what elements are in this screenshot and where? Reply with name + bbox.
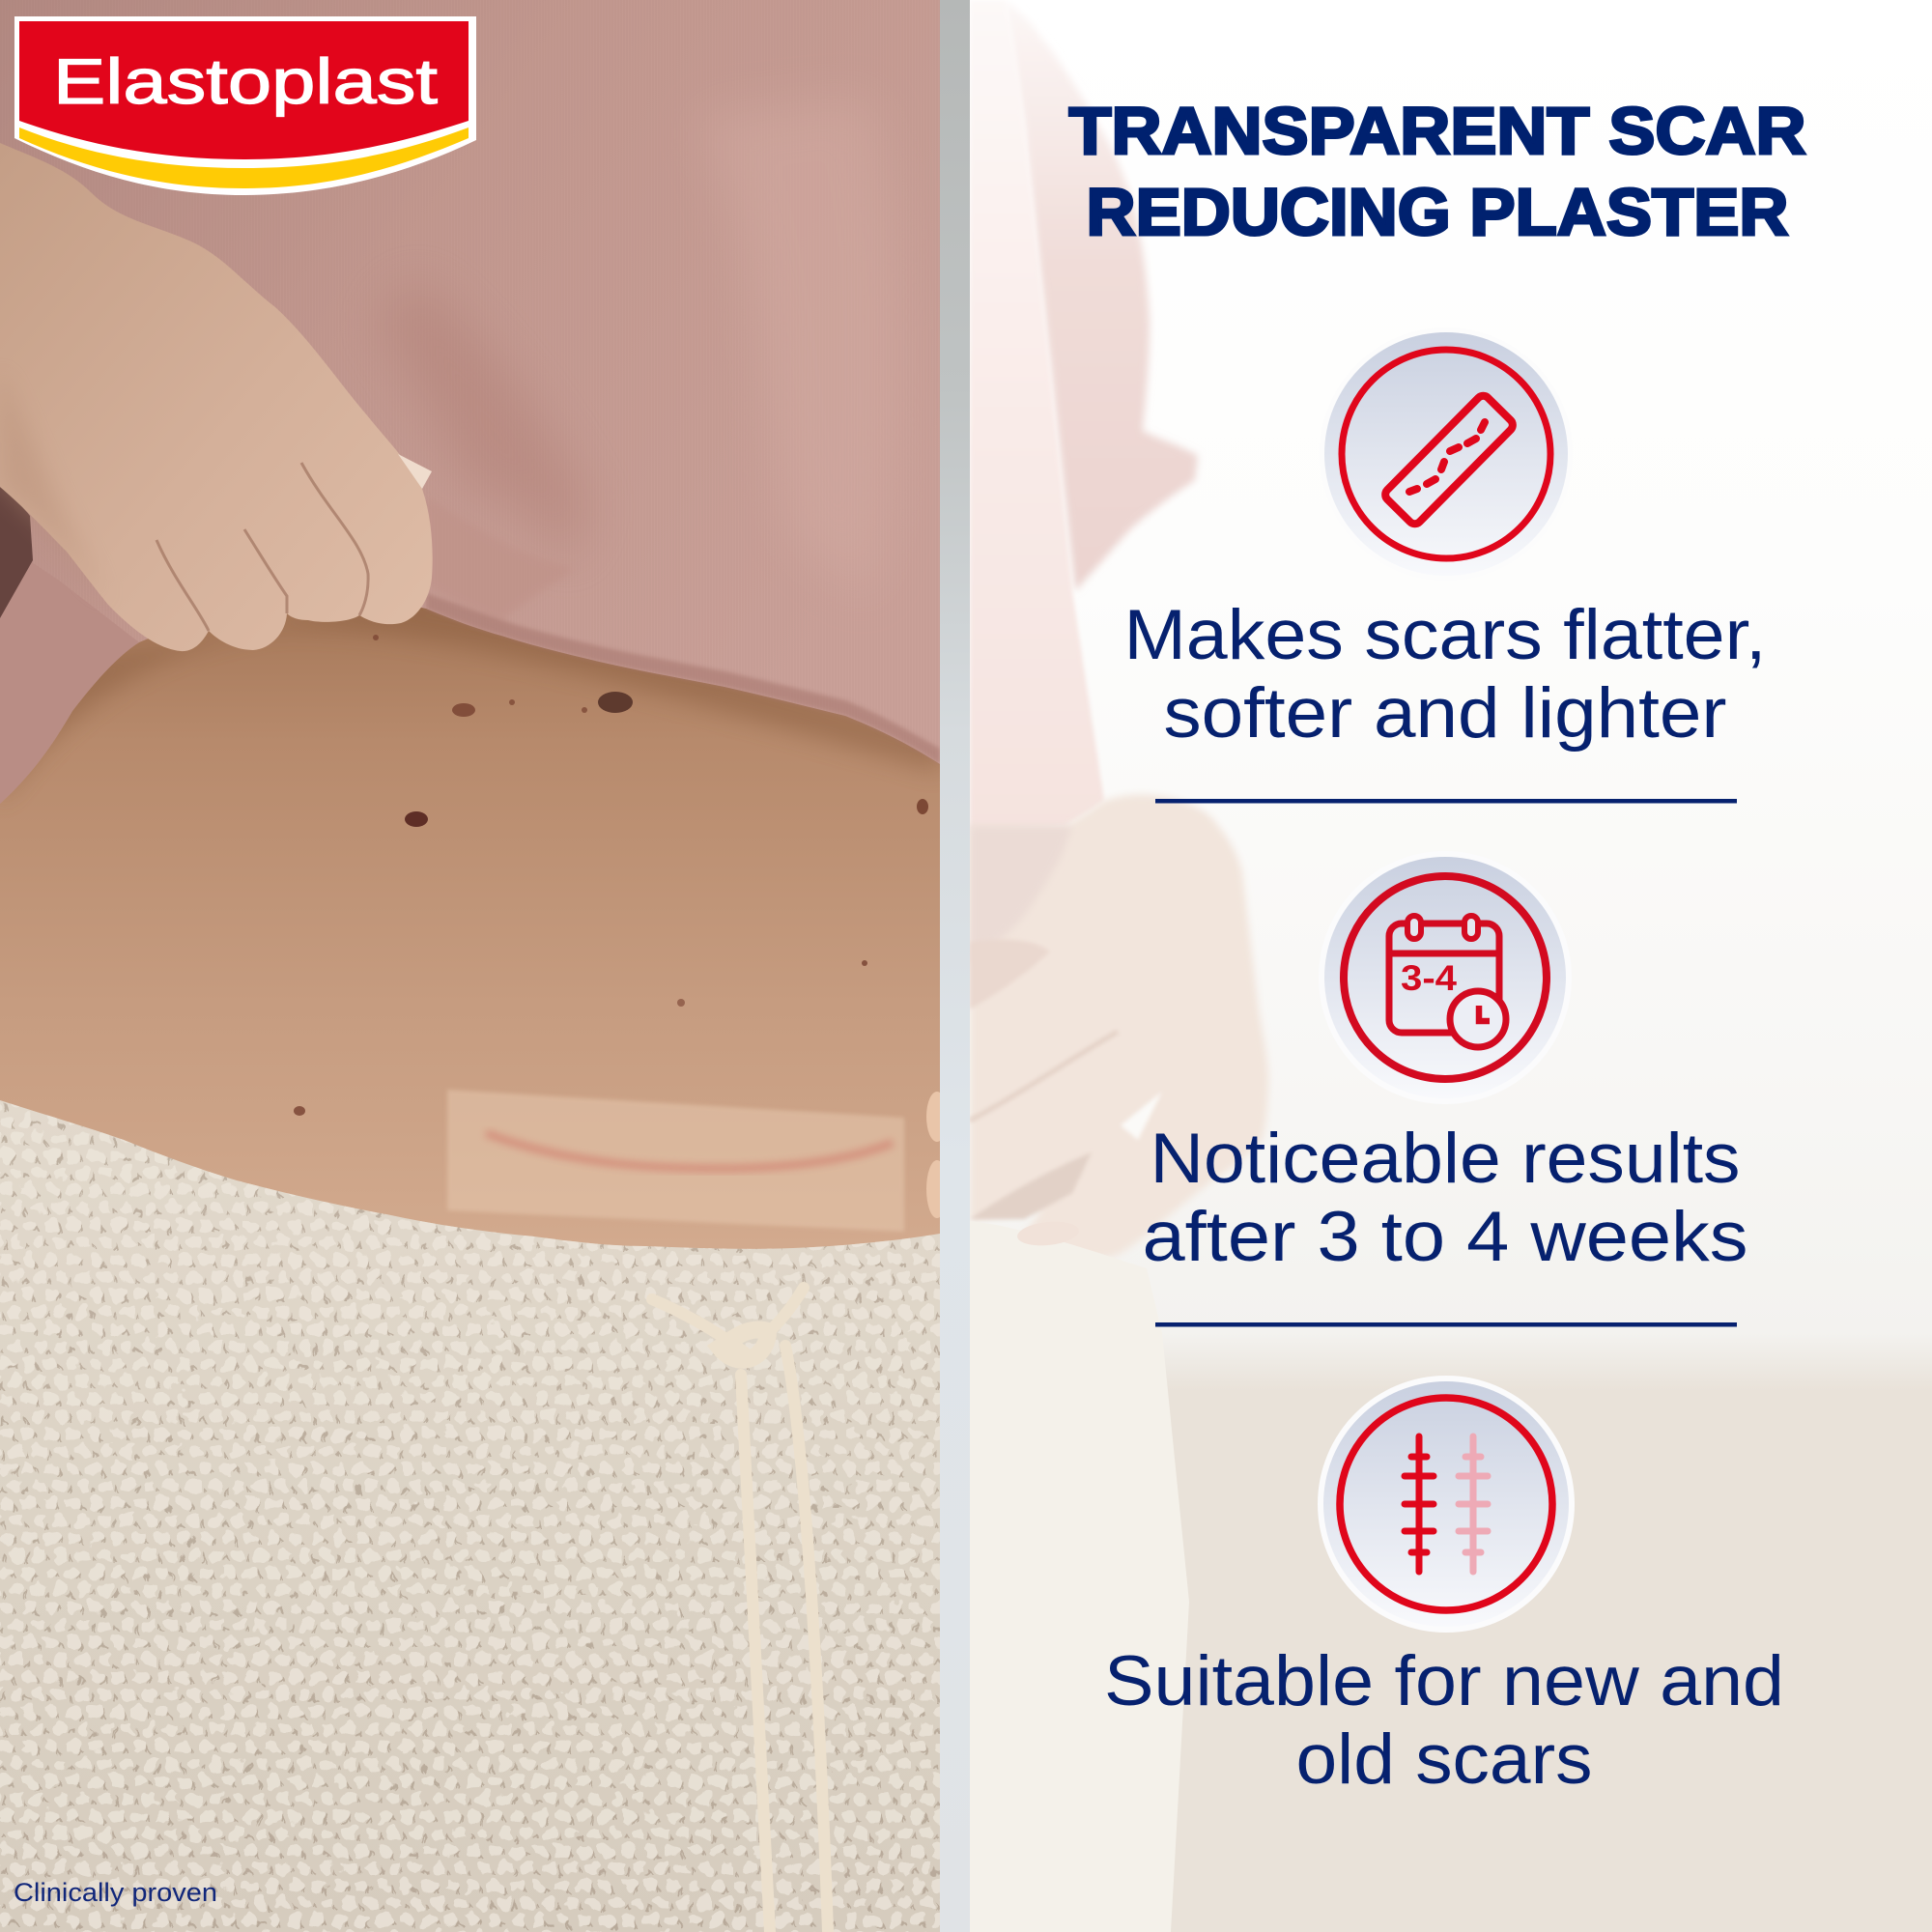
transparent plaster with scar (447, 1090, 904, 1232)
heading: TRANSPARENT SCAR (1068, 94, 1806, 168)
shadow gap behind hand (0, 487, 33, 618)
icon: calendar with clock: 3-4 (1401, 958, 1457, 998)
heading: REDUCING PLASTER (1086, 175, 1789, 249)
faded trousers (970, 1221, 1189, 1932)
text: benefit 3: old scars (1296, 1720, 1592, 1799)
logo: Elastoplast (14, 16, 476, 195)
pink shirt (0, 0, 940, 804)
text: benefit 1: softer and lighter (1163, 674, 1727, 753)
divider 1 (1155, 799, 1737, 804)
shirt cuff at left (0, 580, 139, 804)
divider 2 (1155, 1322, 1737, 1327)
faded room wall (1169, 1391, 1932, 1932)
icon: new and old scars (1318, 1376, 1575, 1633)
heading (1068, 94, 1806, 249)
text: benefit 1: Makes scars flatter, (1124, 596, 1766, 674)
label: clinically proven: Clinically proven (14, 1878, 217, 1907)
text: benefit 1 (1124, 596, 1766, 753)
photo: woman's abdomen with plaster (0, 0, 959, 1932)
text: benefit 2 (1142, 1120, 1748, 1276)
text: benefit 2: after 3 to 4 weeks (1142, 1198, 1748, 1276)
text: benefit 3 (1104, 1642, 1784, 1799)
hand lifting shirt (0, 143, 433, 651)
faded fingernail (1016, 1219, 1080, 1248)
grey divider band (940, 0, 970, 1932)
text: benefit 2: Noticeable results (1150, 1120, 1741, 1198)
fingertips at right waist edge (926, 1092, 948, 1218)
faded hand (970, 794, 1268, 1260)
drawstring (652, 1288, 828, 1932)
knit trousers (0, 1082, 959, 1932)
faded shirt front (970, 0, 1104, 831)
icon: calendar with clock (1319, 851, 1572, 1104)
abdomen skin (0, 589, 940, 1285)
moles and navel (294, 635, 928, 1116)
icon: plaster with scar (1320, 327, 1573, 581)
faded sleeve (1005, 0, 1198, 591)
panel: faded photo background (970, 0, 1932, 1932)
logo: Elastoplast: Elastoplast (53, 45, 438, 117)
text: benefit 3: Suitable for new and (1104, 1642, 1784, 1720)
